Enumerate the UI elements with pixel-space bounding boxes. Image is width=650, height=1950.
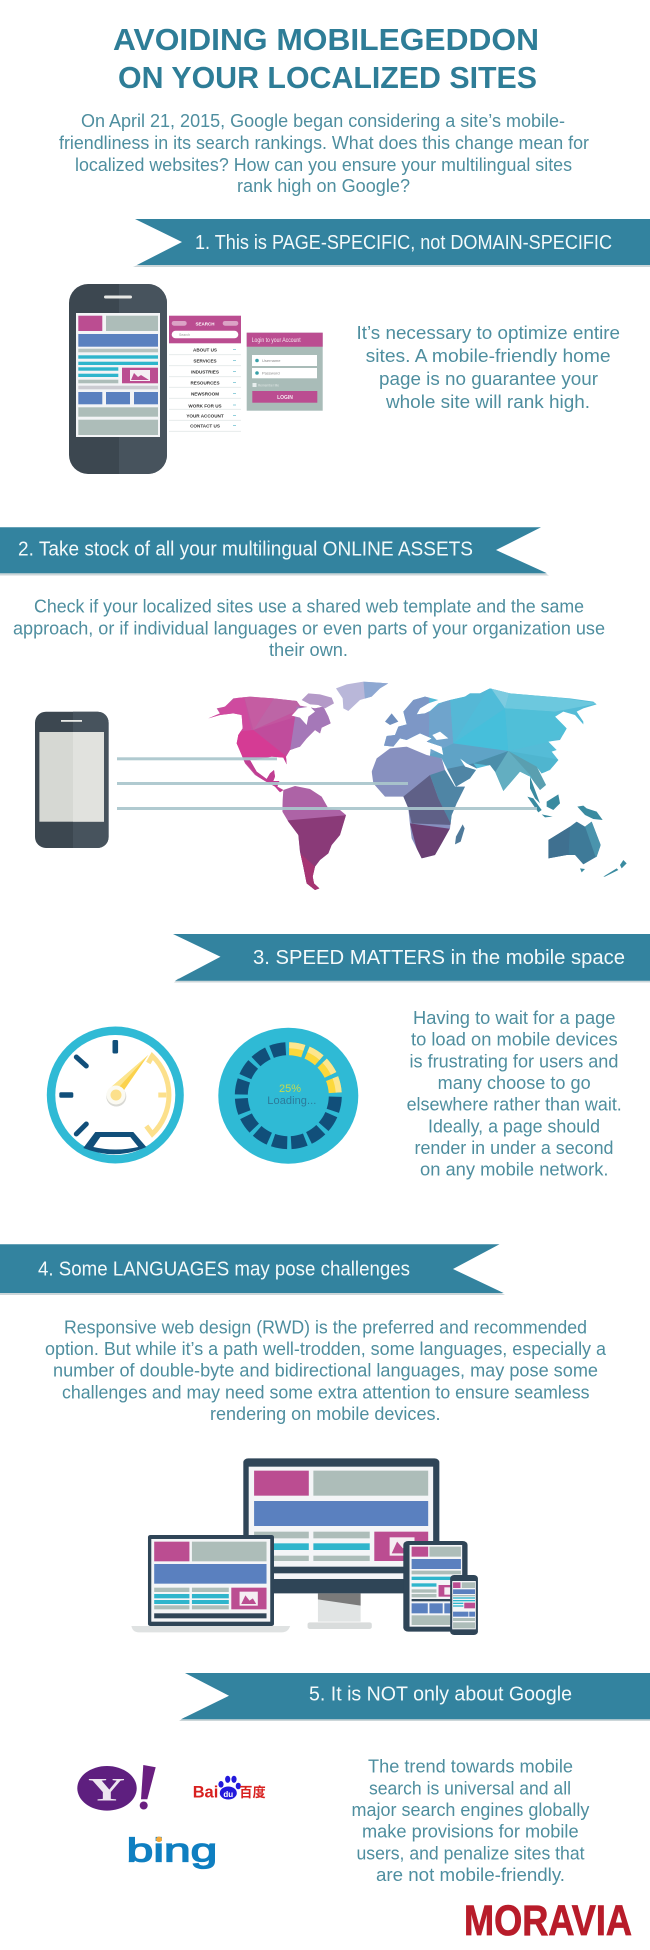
device: laptop: [131, 1535, 290, 1632]
continent: Australia: [548, 822, 601, 864]
continent: South America: [282, 786, 346, 890]
icon: loading dial: 25%: [279, 1083, 301, 1095]
banner 2: [0, 527, 549, 576]
section 1 text: sites. A mobile-friendly home: [366, 346, 611, 366]
logo: Baidu: Bai: [193, 1782, 218, 1801]
intro text: rank high on Google?: [237, 176, 410, 196]
section 5 text: users, and penalize sites that: [356, 1843, 584, 1863]
illustration: smartphone with page layout: [69, 284, 167, 474]
section 3 text: [407, 1008, 622, 1180]
illustration: mobile menu panel: [169, 316, 241, 431]
section 4 text: [45, 1317, 607, 1424]
logo: Yahoo: Y: [88, 1773, 125, 1809]
section 2 text: their own.: [269, 640, 348, 660]
islands: Southeast Asia and Oceania: [527, 777, 627, 877]
illustration: mobile menu panel: YOUR ACCOUNT: [186, 414, 224, 418]
logo: Baidu: 百度: [239, 1784, 266, 1800]
island: Britain: [385, 713, 398, 725]
section 2 text: [13, 597, 605, 660]
section 4 text: option. But while it’s a path well-trodden, some languages, especially a: [45, 1339, 607, 1359]
illustration: mobile menu panel: SERVICES: [193, 358, 217, 364]
illustration: login panel: Login to your Account: [252, 338, 301, 344]
world map: Americas and Greenland: [205, 680, 390, 893]
section 3 text: Ideally, a page should: [428, 1116, 600, 1136]
section 5 text: make provisions for mobile: [362, 1822, 579, 1842]
section 5 text: search is universal and all: [369, 1778, 571, 1798]
title: ON YOUR LOCALIZED SITES: [118, 60, 537, 95]
device: tablet: [403, 1541, 468, 1632]
section 3 text: elsewhere rather than wait.: [407, 1095, 622, 1115]
island: Madagascar: [455, 824, 465, 844]
illustration: mobile menu panel: RESOURCES: [190, 380, 220, 386]
title: AVOIDING MOBILEGEDDON: [113, 22, 539, 57]
connection lines from phone to map: [117, 757, 537, 810]
icon: loading dial: Loading...: [267, 1095, 316, 1107]
section 2 text: Check if your localized sites use a shared web template and the same: [34, 597, 584, 617]
logo: Baidu: [193, 1776, 266, 1801]
illustration: login panel: LOGIN: [277, 395, 293, 401]
continent: Greenland: [336, 682, 388, 711]
illustration: mobile menu panel: CONTACT US: [190, 424, 220, 428]
icon: speedometer: [47, 1026, 184, 1164]
section 4 text: Responsive web design (RWD) is the preferred and recommended: [64, 1317, 587, 1337]
section 5 text: [352, 1757, 589, 1885]
Black Sea: [432, 732, 448, 740]
banner 1: [133, 219, 650, 267]
banner 2: 2. Take stock of all your multilingual ONLINE ASSETS: [18, 539, 473, 561]
illustration: mobile menu panel: NEWSROOM: [191, 392, 219, 396]
banner 5: [179, 1673, 650, 1721]
illustration: login panel: Username: [262, 358, 281, 363]
illustration: login panel: Password: [262, 370, 280, 376]
illustration: mobile menu panel: ABOUT US: [193, 348, 217, 352]
section 1 text: [356, 323, 620, 412]
section 2 text: approach, or if individual languages or even parts of your organization use: [13, 618, 605, 638]
illustration: mobile menu panel: SEARCH: [195, 321, 215, 326]
section 3 text: render in under a second: [414, 1138, 614, 1158]
illustration: mobile menu panel: WORK FOR US: [188, 404, 222, 408]
world map: Eurasia, Africa and Oceania: [370, 685, 627, 877]
icon: loading dial: [218, 1028, 358, 1164]
illustration: mobile menu panel: Search: [179, 333, 190, 337]
logo: Bing: bing: [127, 1832, 217, 1869]
section 3 text: many choose to go: [438, 1073, 591, 1093]
banner 4: [0, 1244, 505, 1295]
continent: North America: [208, 696, 331, 792]
section 4 text: number of double-byte and bidirectional languages, may pose some: [53, 1361, 598, 1381]
device: small phone: [450, 1575, 478, 1635]
section 5 text: major search engines globally: [352, 1800, 589, 1820]
banner 3: [173, 934, 650, 982]
illustration: smartphone: [35, 712, 109, 848]
banner 4: 4. Some LANGUAGES may pose challenges: [38, 1258, 410, 1280]
illustration: mobile menu panel: INDUSTRIES: [191, 370, 219, 374]
title: [113, 22, 539, 95]
Hudson Bay: [292, 707, 315, 725]
intro text: localized websites? How can you ensure your multilingual sites: [75, 155, 572, 175]
section 3 text: is frustrating for users and: [410, 1051, 618, 1071]
banner 1: 1. This is PAGE-SPECIFIC, not DOMAIN-SPECIFIC: [195, 232, 612, 254]
logo: Bing: [127, 1832, 217, 1869]
intro text: On April 21, 2015, Google began considering a site’s mobile-: [81, 111, 565, 131]
logo: Baidu: du: [223, 1790, 233, 1799]
device: desktop monitor: [243, 1458, 439, 1629]
intro text: friendliness in its search rankings. What does this change mean for: [59, 133, 589, 153]
illustration: login panel: Remember Me: [258, 384, 279, 388]
section 5 text: are not mobile-friendly.: [376, 1865, 565, 1885]
continent: Eurasia: [382, 685, 598, 793]
intro text: [59, 111, 589, 196]
banner 3: 3. SPEED MATTERS in the mobile space: [253, 947, 625, 969]
section 4 text: challenges and may need some extra attention to ensure seamless: [62, 1382, 590, 1402]
section 4 text: rendering on mobile devices.: [210, 1404, 440, 1424]
section 3 text: to load on mobile devices: [411, 1030, 618, 1050]
logo: Yahoo: [77, 1765, 156, 1811]
section 1 text: whole site will rank high.: [385, 392, 590, 412]
banner 5: 5. It is NOT only about Google: [309, 1684, 572, 1706]
section 5 text: The trend towards mobile: [368, 1757, 573, 1777]
illustration: responsive devices: [131, 1458, 478, 1635]
illustration: login panel: [247, 333, 323, 411]
continent: Africa: [370, 745, 467, 861]
Arctic islands: [302, 693, 334, 708]
section 1 text: It’s necessary to optimize entire: [356, 323, 620, 343]
section 1 text: page is no guarantee your: [379, 369, 598, 389]
section 3 text: on any mobile network.: [420, 1160, 608, 1180]
section 3 text: Having to wait for a page: [413, 1008, 616, 1028]
